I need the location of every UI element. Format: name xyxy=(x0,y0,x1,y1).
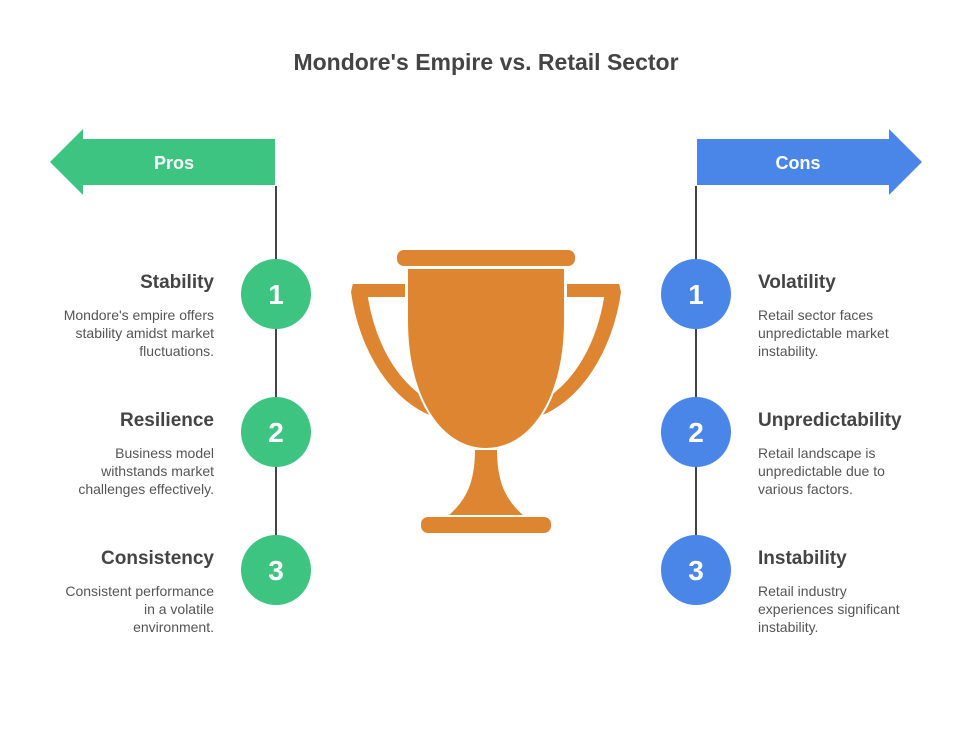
text: Instability xyxy=(758,548,847,569)
icon: trophy xyxy=(350,249,622,534)
text: Retail landscape is xyxy=(758,445,876,461)
text: Unpredictability xyxy=(758,410,902,431)
text: Consistent performance xyxy=(65,583,214,599)
pro 3 xyxy=(65,548,214,635)
con 1 xyxy=(758,272,889,359)
text: Business model xyxy=(115,445,214,461)
cons items xyxy=(758,272,902,635)
cons circles xyxy=(661,259,731,605)
text: Volatility xyxy=(758,272,836,293)
text: unpredictable due to xyxy=(758,463,885,479)
pro 2 xyxy=(78,410,214,497)
text: in a volatile xyxy=(144,601,214,617)
text: Consistency xyxy=(101,548,214,569)
text: Retail industry xyxy=(758,583,847,599)
text: environment. xyxy=(133,619,214,635)
con 3 xyxy=(758,548,900,635)
text: Stability xyxy=(140,272,214,293)
text: withstands market xyxy=(101,463,214,479)
cons circles: 3 xyxy=(688,555,704,586)
text: instability. xyxy=(758,343,818,359)
con 2 xyxy=(758,410,902,497)
pro 1 xyxy=(64,272,214,359)
pros circles: 2 xyxy=(268,417,284,448)
text: fluctuations. xyxy=(139,343,214,359)
text: stability amidst market xyxy=(76,325,214,341)
cons circles: 2 xyxy=(688,417,704,448)
text: experiences significant xyxy=(758,601,900,617)
pros items xyxy=(64,272,214,635)
arrow: pros xyxy=(50,129,275,195)
cons circles: 1 xyxy=(688,279,704,310)
text: challenges effectively. xyxy=(78,481,214,497)
arrow: cons xyxy=(697,129,922,195)
arrow: cons: Cons xyxy=(776,153,820,173)
text: instability. xyxy=(758,619,818,635)
text: Mondore's empire offers xyxy=(64,307,214,323)
arrow: pros: Pros xyxy=(154,153,194,173)
text: Resilience xyxy=(120,410,214,431)
pros circles: 3 xyxy=(268,555,284,586)
pros circles: 1 xyxy=(268,279,284,310)
title: Mondore's Empire vs. Retail Sector xyxy=(293,49,679,75)
pros circles xyxy=(241,259,311,605)
text: various factors. xyxy=(758,481,853,497)
text: Retail sector faces xyxy=(758,307,873,323)
text: unpredictable market xyxy=(758,325,889,341)
